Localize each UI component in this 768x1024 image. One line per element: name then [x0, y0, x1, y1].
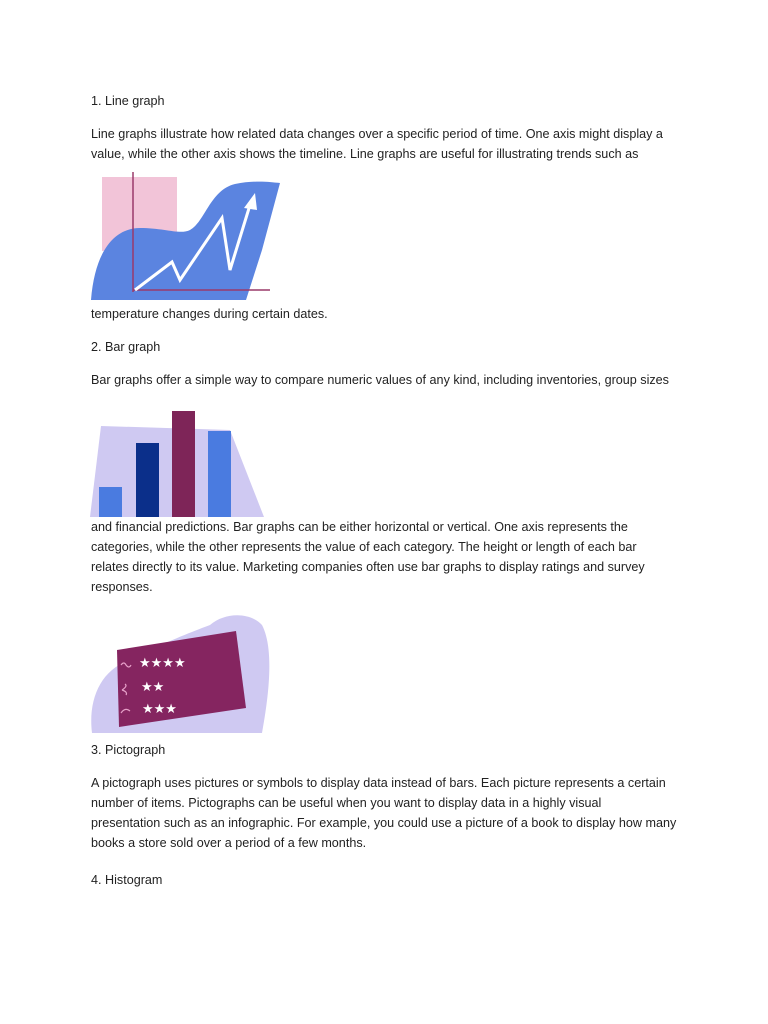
text block: pictograph description: A pictograph uses pictures or symbols to display data instead of bars. Each picture represents a certain: [91, 776, 666, 790]
text block: pictograph description: books a store sold over a period of a few months.: [91, 836, 366, 850]
heading: histogram: 4. Histogram: [91, 873, 162, 887]
text block: bar graph continued: and financial predictions. Bar graphs can be either horizontal or vertical. One axis represents the: [91, 520, 628, 534]
chart: pictograph illustration: ★★★: [142, 702, 177, 717]
text block: bar graph continued: relates directly to its value. Marketing companies often use bar graphs to display ratings and survey: [91, 560, 645, 574]
text block: bar graph continued: [91, 520, 645, 594]
text block: line graph description: value, while the other axis shows the timeline. Line graphs are useful for illustrating trends such as: [91, 147, 638, 161]
heading: bar graph: 2. Bar graph: [91, 340, 160, 354]
text block: pictograph description: number of items. Pictographs can be useful when you want to display data in a highly visual: [91, 796, 601, 810]
text block: bar graph continued: responses.: [91, 580, 153, 594]
heading: line graph: 1. Line graph: [91, 94, 165, 108]
chart: pictograph illustration: ★★★★: [139, 656, 186, 671]
heading: pictograph: 3. Pictograph: [91, 743, 165, 757]
text block: line graph continued: temperature changes during certain dates.: [91, 307, 328, 321]
chart: pictograph illustration: ★★: [141, 680, 164, 695]
text block: line graph description: [91, 127, 663, 161]
text block: line graph description: Line graphs illustrate how related data changes over a specific period of time. One axis might display a: [91, 127, 663, 141]
text block: bar graph continued: categories, while the other represents the value of each category. The height or length of each bar: [91, 540, 637, 554]
text block: pictograph description: [91, 776, 676, 850]
text block: pictograph description: presentation such as an infographic. For example, you could use a picture of a book to display how many: [91, 816, 676, 830]
text block: bar graph description: Bar graphs offer a simple way to compare numeric values of any kind, including inventories, group sizes: [91, 373, 669, 387]
